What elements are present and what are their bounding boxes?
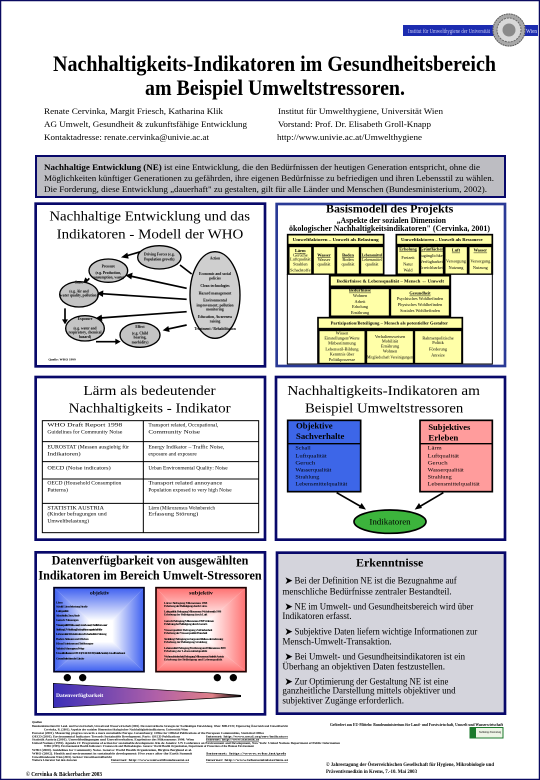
box: objective: Objektive <box>296 420 333 430</box>
panel: subjective data: Wasserqualität: Befragung Zufriedenheit <box>164 628 213 632</box>
diagram: DPSEEA model: Effect <box>135 325 145 329</box>
flow chart: indicator model: Politik <box>432 340 445 345</box>
panel: Datenverfügbarkeit <box>36 552 265 714</box>
box: objective: Geruch <box>295 461 316 467</box>
flow chart: indicator model: Bedürfnisse & Lebensqualität – Mensch ↔ Umwelt <box>337 278 445 283</box>
conference note <box>326 760 494 775</box>
flow chart: indicator model: Rahmenpolitische <box>422 335 454 340</box>
references: Internet: http://www.lebensministerium.at <box>206 758 289 762</box>
panel: Basismodell <box>277 202 505 366</box>
table: noise indicators: Indikatoren) <box>47 452 81 457</box>
wedge: Datenverfügbarkeit <box>53 683 241 708</box>
flow chart: indicator model: Nutzung <box>449 265 464 270</box>
authors left: Renate Cervinka, Margit Friesch, Katharina Klik <box>44 106 224 116</box>
title: Nachhaltigkeits-Indikatoren im Gesundheitsbereich <box>53 51 496 76</box>
table: noise indicators: Community Noise <box>148 430 200 435</box>
flow chart: indicator model: Einstellungen/Werte <box>324 336 360 341</box>
box: subjective: Wasserqualität <box>428 468 464 474</box>
flow chart: indicator model: Bedürfnisse <box>349 288 371 293</box>
flow chart: indicator model: Luftqualität <box>290 257 311 262</box>
heading: Datenverfügbarkeit <box>38 553 262 582</box>
flow chart: indicator model: Lebensstil-Bildung <box>325 347 359 352</box>
flow chart: indicator model: Mitbestimmung <box>328 341 357 346</box>
box: subjective: Luftqualität <box>428 453 459 460</box>
flow chart: indicator model: Verhaltensweisen <box>375 334 406 339</box>
panel: WHO model <box>36 204 265 366</box>
heading: Lärm: Lärm als bedeutender <box>83 383 216 398</box>
references: WHO (1999). Environmental Health Indicators: Framework and Methodologies. Geneva: World Health Organization, Department of Protection of the Human Environment <box>44 744 255 748</box>
heading: Erkenntnisse: Erkenntnisse <box>356 558 423 570</box>
findings list: ganzheitliche Darstellung mittels objektiver und <box>282 686 456 696</box>
references: OECD (2001). Environmental Indicators Towards Sustainable Development. Paris: OECD Publications <box>32 734 181 738</box>
heading: Umweltstressoren: Nachhaltigkeits-Indikatoren am <box>287 383 481 398</box>
box: objective: Strahlung <box>295 475 320 481</box>
references: Internet: http://www.umweltbundesamt.at <box>111 758 190 762</box>
ellipse: Indikatoren <box>354 510 426 533</box>
diagram: DPSEEA model: consumption, waste) <box>92 276 125 280</box>
panel: objective data: Schadstoffe, Ozon, Staub <box>56 614 80 618</box>
table: noise indicators: Energy Indikator – Traffic Noise, <box>148 445 224 450</box>
panel: subjective data: Erhebung der Belästigung durch Geruch <box>164 622 207 626</box>
findings list: ➤ Subjektive Daten liefern wichtige Informationen zur <box>285 626 477 636</box>
diagram: DPSEEA model: (e.g. Child <box>132 332 148 336</box>
flow chart: indicator model: Zugänglichkeit <box>419 253 446 258</box>
heading: Umweltstressoren <box>287 383 481 415</box>
box: subjective: Subjektives <box>428 422 471 432</box>
table: noise indicators: STATISTIK AUSTRIA <box>47 506 105 511</box>
heading: WHO model: Nachhaltige Entwicklung und das <box>49 210 250 225</box>
flow chart: indicator model: Lebensmittel <box>362 257 383 262</box>
flow chart: indicator model: Mobilität <box>382 338 399 343</box>
flow chart: indicator model: Arbeit <box>354 299 366 304</box>
institute right: Institut für Umwelthygiene, Universität Wien <box>278 106 444 116</box>
findings list: ➤ Bei der Definition NE ist die Bezugnahme auf <box>285 575 457 585</box>
table: noise indicators: Population exposed to very high Noise <box>148 489 232 494</box>
heading: Basismodell: ökologischer Nachhaltigkeitsindikatoren" (Cervinka, 2001) <box>289 224 490 233</box>
heading: Lärm: Nachhaltigkeits - Indikator <box>69 400 231 415</box>
funding note: Gefördert aus EU-Mitteln: Bundesministerium für Land- und Forstwirtschaft, Umwelt und Wasserwirtschaft <box>330 722 504 727</box>
diagram: DPSEEA model: Clean technologies <box>200 284 230 288</box>
panel: Umweltstressoren <box>276 377 505 540</box>
findings list: subjektiver Zugänge erforderlich. <box>282 695 404 705</box>
panel: subjective data: Erhebung der Belästigung und Lebensqualität <box>164 657 223 661</box>
table: noise indicators: Patterns) <box>47 489 69 494</box>
findings list: menschliche Bedürfnisse zentraler Bestandteil. <box>282 586 452 596</box>
flow chart: indicator model: Lebensmittel <box>362 252 383 257</box>
panel: objective data: Verkehr: Fahrzeuge und Wege <box>56 646 85 650</box>
box: subjective <box>420 420 492 492</box>
flow chart: indicator model: Versorgung <box>470 259 491 264</box>
references: Eurostat (2001). Measuring progress towards a more sustainable Europe. Luxembourg: Office for Official Publications of the European Communities, Statistical Office <box>32 731 264 735</box>
arrow: objective to indicators <box>337 493 366 510</box>
panel: objective data: Umweltindikatoren: OECD, EUROSTAT, Statistik Austria, Umweltbundesamt <box>56 651 126 655</box>
authors left <box>44 106 248 142</box>
panel: subjective data: subjektiv <box>189 592 214 597</box>
institute right: http://www.univie.ac.at/Umwelthygiene <box>277 132 422 142</box>
flow chart: indicator model: Natur <box>403 261 413 266</box>
panel: subjective data: Wohnzufriedenheit: Befragung Mikrozensus Statistik Austria <box>164 654 224 658</box>
flow chart: indicator model: Wohnen <box>353 293 368 298</box>
table: noise indicators: Guidelines for Community Noise <box>47 430 122 435</box>
diagram: DPSEEA model: (e.g. Air and <box>69 289 89 293</box>
diagram: DPSEEA model: Treatment / Rehabilitation <box>194 327 236 331</box>
diagram: DPSEEA model: Population growth) <box>144 258 175 262</box>
flow chart: indicator model: Wasser <box>318 257 331 262</box>
diagram: DPSEEA model: policies <box>209 277 221 281</box>
panel: objective data: objektiv <box>90 592 110 597</box>
panel: objective data: Boden: Altlasten und Flächen <box>56 637 89 641</box>
flow chart: indicator model: Wasser <box>317 252 331 257</box>
references: United Nations (1992). Agenda 21: Programme of action for sustainable development. Rio de Janeiro: UN Conference on Environment and Development, New York: United Nations Department of Public Information <box>32 741 340 745</box>
logo: Institut für Umwelthygiene: Institut für Umwelthygiene der Universität <box>408 28 490 35</box>
panel: subjective data: Erhebung der Belästigung durch Lärm <box>164 604 208 608</box>
diagram: DPSEEA model: Pressure <box>102 265 115 269</box>
panel: subjective data: Erhebung der Belästigung durch Luft <box>164 613 208 617</box>
table: noise indicators: Urban Environmental Quality: Noise <box>148 467 228 472</box>
panel: Erkenntnisse <box>277 553 505 714</box>
conference note: © Jahrestagung der Österreichischen Gesellschaft für Hygiene, Mikrobiologie und <box>326 760 494 768</box>
flow chart: indicator model: Ernährung <box>351 310 370 315</box>
flow chart: indicator model: Umweltfaktoren – Umwelt als Ressource <box>401 237 483 242</box>
flow chart: indicator model: Politikprozesse <box>329 357 355 362</box>
findings list: ➤ NE im Umwelt- und Gesundheitsbereich wird über <box>285 601 473 611</box>
panel: objective data: Gesundheitsdaten der Länder <box>56 656 85 660</box>
panel: objective data <box>54 588 144 672</box>
flow chart: indicator model: Partizipation/Beteiligung – Mensch als potentieller Gestalter <box>331 321 448 326</box>
box: subjective: Geruch <box>428 461 448 467</box>
diagram: DPSEEA model: Economic and social <box>199 272 231 276</box>
flow chart: indicator model: Erreichbarkeit <box>420 265 445 270</box>
diagram: DPSEEA model: Quelle: WHO 1999 <box>48 357 76 361</box>
panel: objective data: Strahlung: UV-Strahlung, Radon, elektromagnetische Felder <box>56 628 103 632</box>
ellipse: Indikatoren: Indikatoren <box>369 517 411 526</box>
findings list <box>282 575 477 705</box>
box: objective: Wasserqualität <box>295 468 332 474</box>
flow chart: indicator model: Wissen <box>336 331 349 336</box>
heading: Basismodell: Basismodell des Projekts <box>326 202 454 216</box>
conference note: Präventivmedizin in Krems, 7.-10. Mai 2003 <box>326 769 417 775</box>
panel: objective data: Luftqualität <box>56 609 70 613</box>
diagram: DPSEEA model <box>48 246 240 361</box>
heading: Datenverfügbarkeit: Datenverfügbarkeit von ausgewählten <box>52 553 248 567</box>
flow chart: indicator model: Ernährung <box>381 343 400 348</box>
flow chart: indicator model: Verfügbarkeit <box>420 259 445 264</box>
panel: objective data: Lebensmittel: Rückstände und Schadstoffe in Nahrung <box>56 632 107 636</box>
flow chart: indicator model: Grünflächen <box>420 246 444 251</box>
references: Statistik Austria (2001). Umweltbedingungen und Umweltverhalten. Ergebnisse des Mikrozensus 1998. Wien <box>32 738 194 742</box>
flow chart: indicator model: Erholung <box>399 246 418 251</box>
diagram: DPSEEA model: morbidity) <box>132 340 149 344</box>
box: subjective: Erleben <box>428 433 459 443</box>
panel: subjective data: Erhebung der Wasserqualität Haushalt <box>164 631 208 635</box>
logo: funding <box>470 728 503 738</box>
panel: subjective data: Lärm: Befragung Mikrozensus 1998 <box>164 601 208 605</box>
flow chart: indicator model: Versorgung <box>446 259 467 264</box>
references: Quellen <box>32 720 42 724</box>
heading: WHO model: Indikatoren - Modell der WHO <box>57 228 243 243</box>
flow chart: indicator model: Psychisches Wohlbefinden <box>397 296 444 301</box>
flow chart: indicator model: Freizeit <box>401 255 415 260</box>
flow chart: indicator model: Erholung <box>352 304 369 309</box>
table: noise indicators: Umweltbelastung) <box>47 519 90 524</box>
table: noise indicators: (Kinder befragungen und <box>47 513 107 518</box>
flow chart: indicator model: qualität <box>342 262 355 267</box>
heading: Basismodell: „Aspekte der sozialen Dimension <box>337 216 446 225</box>
definition box: Die Forderung, diese Entwicklung „dauerhaft" zu gestalten, gilt für alle Länder und Menschen (Bundesministerium, 2002). <box>44 184 487 194</box>
authors left: AG Umwelt, Gesundheit & zukunftsfähige Entwicklung <box>44 119 248 129</box>
table: noise indicators: EUROSTAT (Messen ausgiebig für <box>47 445 130 450</box>
flow chart: indicator model: Umweltfaktoren – Umwelt als Belastung <box>293 237 380 242</box>
findings list: Indikatoren erfasst. <box>282 611 352 621</box>
panel: objective data: Schall: Lärmbelastung Straße <box>56 605 88 609</box>
box: objective <box>288 420 361 492</box>
dots <box>64 674 237 681</box>
flow chart: indicator model: Wasser <box>474 248 487 253</box>
diagram: DPSEEA model: Action <box>210 256 220 260</box>
heading: Umweltstressoren: Beispiel Umweltstressoren <box>305 400 464 415</box>
flow chart: indicator model: Wald <box>403 268 413 273</box>
logo: funding: Nachhaltige Entwicklung <box>479 731 501 734</box>
flow chart: indicator model <box>287 234 493 364</box>
table: noise indicators: WHO Draft Report 1998 <box>47 424 123 429</box>
flow chart: indicator model: Strahlen <box>293 261 308 266</box>
logo: Institut für Umwelthygiene: Wien <box>526 29 537 35</box>
panel: subjective data: Geruch: Befragung Mikrozensus 1998 Wohnen <box>164 619 214 623</box>
table: noise indicators: Transport related annoyance <box>148 482 222 487</box>
flow chart: indicator model: Nutzung <box>473 265 489 270</box>
flow chart: indicator model: Anreize <box>431 353 445 358</box>
box: subjective: Strahlung <box>428 475 452 481</box>
diagram: DPSEEA model: hearing, <box>134 336 147 340</box>
flow chart: indicator model: Soziales Wohlbefinden <box>400 308 441 313</box>
flow chart: indicator model: Luft <box>452 248 461 253</box>
institute right: Vorstand: Prof. Dr. Elisabeth Groll-Knapp <box>278 119 431 129</box>
references: WHO (2002). Health and environment in sustainable development: Five years after the Earth Summit <box>32 752 193 756</box>
box: subjective: Lebensmittelqualität <box>428 482 480 488</box>
panel: subjective data: Strahlung: Befragung zu Sorge und Risikowahrnehmung <box>164 637 224 641</box>
panel: objective data: Lärm <box>56 600 63 604</box>
findings list: ➤ Bei Umwelt- und Gesundheitsindikatoren ist ein <box>285 652 465 662</box>
diagram: DPSEEA model: water quality, pollution) <box>60 294 99 298</box>
table: noise indicators: Lärm (Mikrozensus Wohnbereich <box>148 506 216 511</box>
references: WHO (2000). Guidelines for Community Noise. Geneva: World Health Organization, Birgitta Berglund et al. <box>32 748 192 752</box>
diagram: DPSEEA model: hazard) <box>79 335 92 339</box>
flow chart: indicator model: Boden <box>342 257 354 262</box>
flow chart: indicator model: Kenntnis über <box>330 352 355 357</box>
wedge: Datenverfügbarkeit: Datenverfügbarkeit <box>56 694 104 699</box>
table: noise indicators <box>42 421 259 533</box>
table: noise indicators: Transport related, Occupational, <box>148 424 218 429</box>
logo: Institut für Umwelthygiene <box>403 14 538 46</box>
box: subjective: Lärm <box>428 446 442 452</box>
box: objective: Luftqualität <box>295 453 327 460</box>
diagram: DPSEEA model: Exposure <box>78 317 93 321</box>
panel: objective data: Geruch: Messungen <box>56 618 79 622</box>
table: noise indicators: Erfassung Störung) <box>148 513 199 518</box>
panel: objective data: Wasserqualität: Trinkwasser, Grundwasser, Oberflächenwasser <box>56 623 108 627</box>
diagram: DPSEEA model: monitoring <box>206 308 224 312</box>
flow chart: indicator model: Schadstoffe <box>290 267 311 272</box>
references: Cervinka, R. (2001). Aspekte der sozialen Dimension ökologischer Nachhaltigkeitsindikatoren. Universität Wien <box>44 728 188 732</box>
findings list: ➤ Zur Optimierung der Gestaltung NE ist eine <box>285 676 448 686</box>
diagram: DPSEEA model: raising <box>210 320 221 324</box>
table: noise indicators: OECD (Noise indicators) <box>47 467 111 472</box>
table: noise indicators: exposure and exposure <box>148 452 197 457</box>
title <box>53 51 496 100</box>
flow chart: indicator model: qualität <box>366 262 379 267</box>
definition box: Möglichkeiten künftiger Generationen zu gefährden, ihre eigenen Bedürfnisse zu befriedigen und ihren Lebensstil zu wählen. <box>44 173 494 183</box>
copyright: © Cervinka & Bäckerbacher 2003 <box>26 771 102 778</box>
findings list: Überhang an objektiven Daten festzustellen. <box>282 661 445 671</box>
diagram: DPSEEA model: Hazard management <box>199 292 232 296</box>
flow chart: indicator model: Wohnen <box>383 348 398 353</box>
heading: Basismodell <box>289 202 490 233</box>
flow chart: indicator model: Boden <box>342 252 354 257</box>
diagram: DPSEEA model: respiratory, chemical <box>68 330 102 334</box>
panel: Lärm <box>36 377 265 540</box>
diagram: DPSEEA model: Environmental <box>203 299 227 303</box>
references: Bundesministerium für Land- und Forstwirtschaft, Umwelt und Wasserwirtschaft (2002). Die österreichische Strategie zur Nachhaltigen Entwicklung. Wien: BMLFUW, Eigenverlag Österreich und Umweltbericht <box>32 723 289 728</box>
flow chart: indicator model: Physisches Wohlbefinden <box>398 302 443 307</box>
title: am Beispiel Umweltstressoren. <box>145 75 405 100</box>
flow chart: indicator model: Förderung <box>429 347 448 352</box>
references: Weitere Literatur bei den Autoren <box>32 758 77 762</box>
diagram: DPSEEA model: (e.g. water and <box>73 326 97 330</box>
box: objective: Schall <box>295 446 311 452</box>
flow chart: indicator model: Mitgliedschaft Vereinigungen <box>367 355 414 360</box>
references: Internet: http://www.oecd.org/env/indicators <box>206 734 289 738</box>
diagram: DPSEEA model: (e.g. Production, <box>95 271 121 275</box>
panel: subjective data <box>156 588 246 672</box>
panel: objective data: Klima: Emissionen und Treibhausgase <box>56 642 94 646</box>
panel: subjective data: Lebensmittel: Befragung Ernährung und Mikrozensus 1999 <box>164 646 226 650</box>
table: noise indicators: OECD (Household Consumption <box>47 482 122 487</box>
findings list: Mensch-Umwelt-Transaktion. <box>282 636 392 646</box>
definition box <box>36 156 505 197</box>
flow chart: indicator model: Gerüche <box>293 252 308 257</box>
diagram: DPSEEA model: State <box>75 281 83 285</box>
flow chart: indicator model: qualität <box>318 262 331 267</box>
diagram: DPSEEA model: Education, Awareness <box>198 315 233 319</box>
panel: subjective data: Erhebung der Belästigung Strahlung <box>164 640 208 644</box>
flow chart: indicator model: Lärm <box>295 248 306 253</box>
flow chart: indicator model: Gesundheit <box>409 291 431 296</box>
references: Internet: http://www.statistik.at <box>206 738 260 742</box>
heading: Lärm <box>69 383 231 415</box>
definition box: Nachhaltige Entwicklung (NE) ist eine Entwicklung, die den Bedürfnissen der heutigen Generation entspricht, ohne die <box>44 162 480 172</box>
authors left: Kontaktadresse: renate.cervinka@univie.ac.at <box>44 132 210 142</box>
diagram: DPSEEA model: Driving Forces (e.g. <box>144 253 175 257</box>
arrow: subjective to indicators <box>415 493 443 510</box>
institute right <box>277 106 444 142</box>
panel: subjective data: Erhebung der Lebensmittelqualität <box>164 649 208 653</box>
panel: subjective data: Luftqualität: Befragung Mikrozensus Wohnbereich 1998 <box>164 610 222 614</box>
heading: WHO model <box>49 210 250 243</box>
box: objective: Lebensmittelqualität <box>295 482 348 488</box>
references: Internet: http://www.who.int/peh <box>206 752 286 756</box>
heading: Datenverfügbarkeit: Indikatoren im Bereich Umwelt-Stressoren <box>38 568 262 582</box>
box: objective: Sachverhalte <box>296 431 344 441</box>
references: Umweltbundesamt Wien (2001). Sechster Umweltkontrollbericht <box>32 755 113 759</box>
diagram: DPSEEA model: improvement; pollution <box>196 303 234 307</box>
references <box>32 720 340 762</box>
